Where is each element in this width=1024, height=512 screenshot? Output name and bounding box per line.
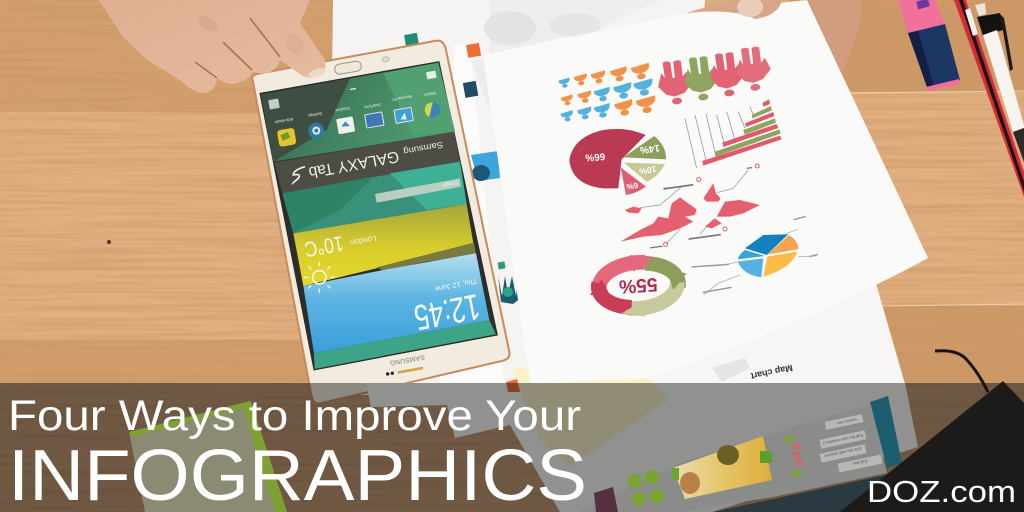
Samsung logo and home dots: SAMSUNG — [389, 353, 425, 366]
chart: small upside-down people pictogram — [558, 63, 658, 122]
website mockup inside the banner: Edit box with shadow 2 — [822, 433, 863, 446]
chart: exploded percentage pie: 66% — [585, 150, 606, 163]
website mockup inside the banner — [594, 396, 902, 512]
highlighter marker — [898, 0, 960, 91]
bottom stack of printed sheets — [366, 366, 918, 512]
Samsung Galaxy Tab S banner text — [293, 140, 444, 184]
chart: world map with callouts — [621, 164, 760, 249]
Samsung Galaxy Tab S banner text: GALAXY Tab — [307, 147, 400, 180]
DOZ.com logo: DOZ.com — [867, 474, 1016, 509]
paper sheets under the tablet — [328, 0, 705, 395]
weather widget — [302, 231, 377, 293]
website mockup inside the banner: Edit box with shadow — [824, 446, 862, 459]
chart: tilted bar chart — [685, 99, 782, 168]
main paper with printed charts — [483, 0, 928, 384]
small app labels — [274, 91, 437, 125]
title line one: Four Ways to Improve Your — [8, 392, 581, 440]
launcher grid and widget icons — [268, 71, 437, 109]
translucent banner — [0, 383, 1024, 512]
Samsung Galaxy Tab S banner text: Samsung — [403, 140, 444, 157]
weather widget: London — [349, 234, 377, 247]
black pouch with cord — [840, 351, 1024, 512]
small app labels: Dropbox — [335, 106, 351, 113]
chart: 55% cycle ring: 55% — [618, 273, 658, 297]
chart: exploded percentage pie — [569, 129, 666, 195]
sheet below the main page with map chart label: Map chart — [750, 363, 794, 381]
home button and camera — [334, 57, 389, 75]
orange corner tab near the banner — [506, 379, 520, 392]
clock and date — [411, 277, 483, 339]
colored tabs on the under sheet — [404, 33, 521, 304]
mechanical pen — [975, 3, 1024, 162]
chart: exploded percentage pie: 10% — [638, 164, 657, 177]
tablet body — [252, 41, 510, 404]
clock and date: 12:45 — [411, 286, 483, 339]
small app labels: Remote PC — [391, 94, 412, 102]
right hand holding the paper — [686, 0, 862, 72]
website mockup inside the banner: Search box — [836, 417, 857, 426]
small app labels: SideSync — [364, 102, 381, 110]
tablet screen — [260, 62, 497, 370]
Google search bar: Google — [441, 179, 458, 188]
sheet below the main page with map chart label — [530, 280, 905, 384]
chart: large upside-down people — [656, 45, 773, 106]
website mockup inside the banner: Edit box — [852, 459, 867, 466]
chart: exploded percentage pie: 14% — [639, 142, 660, 155]
small app labels: WebEx — [423, 91, 437, 98]
Samsung logo and home dots — [386, 353, 425, 376]
small app labels: Settings — [307, 111, 323, 119]
small app labels: Kids Mode — [274, 117, 294, 125]
tablet — [252, 41, 510, 404]
Google search bar — [375, 178, 461, 203]
chart: blue and orange pie — [692, 216, 818, 295]
weather widget: 10°C — [302, 231, 345, 262]
clock and date: Thu, 12 June — [434, 277, 478, 294]
chart: exploded percentage pie: 6% — [626, 180, 639, 191]
red striped pencil — [954, 0, 1024, 197]
green notebook — [129, 401, 287, 512]
chart: 55% cycle ring — [590, 255, 687, 317]
app icons row — [277, 102, 440, 147]
left hand on the tablet — [99, 0, 327, 93]
